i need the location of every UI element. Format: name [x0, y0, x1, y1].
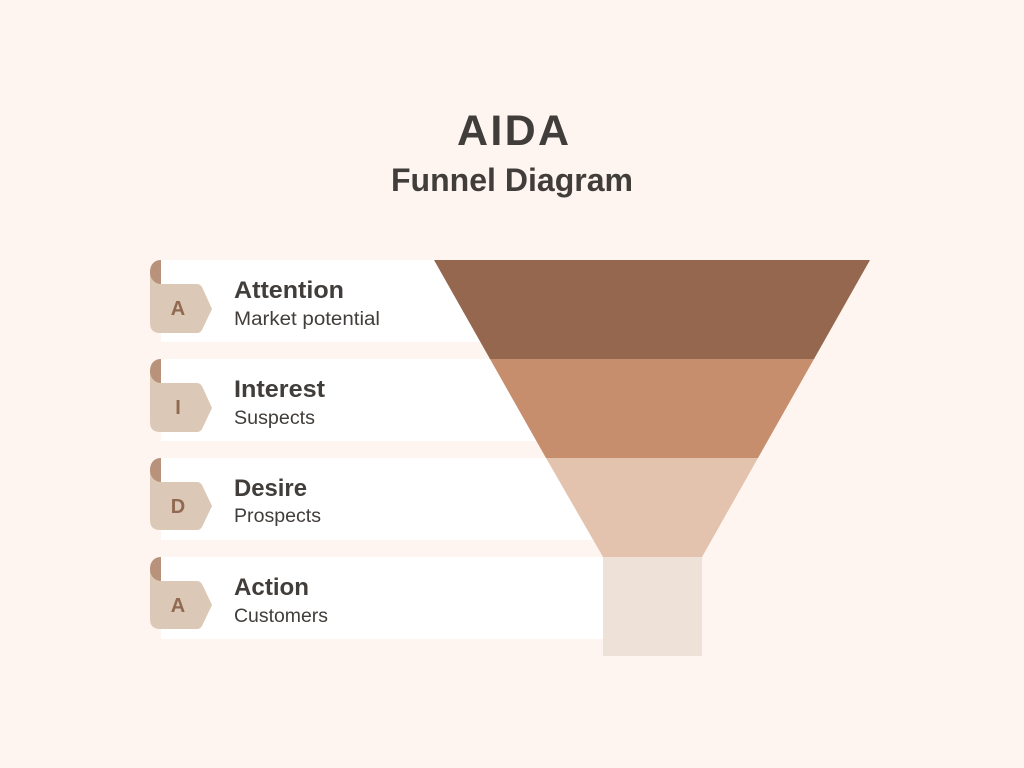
icon: badge A — [150, 260, 212, 333]
funnel tier: action — [603, 557, 702, 656]
text: Customers: Customers — [234, 606, 328, 627]
chart: funnel — [434, 260, 870, 656]
heading: Desire: Desire — [234, 475, 307, 502]
white label bar — [161, 260, 501, 342]
white label bar — [161, 458, 611, 540]
text: Suspects: Suspects — [234, 408, 315, 429]
panel: attention row — [150, 260, 501, 342]
panel: desire row — [150, 458, 611, 540]
title — [391, 107, 633, 198]
funnel tier: attention — [434, 260, 870, 359]
funnel tier: desire — [546, 458, 758, 557]
icon: badge A: A — [171, 298, 185, 320]
icon: badge D — [150, 458, 212, 530]
text: Prospects: Prospects — [234, 506, 321, 527]
icon: badge A — [150, 557, 212, 629]
funnel tier: interest — [490, 359, 814, 458]
panel: action row — [150, 557, 611, 639]
text: Market potential: Market potential — [234, 309, 380, 330]
icon: badge A: A — [171, 595, 185, 617]
icon: badge D: D — [171, 496, 185, 518]
heading: Action: Action — [234, 574, 309, 601]
title: AIDA — [457, 107, 569, 155]
heading: Attention: Attention — [234, 277, 344, 304]
heading: Interest: Interest — [234, 376, 325, 403]
white label bar — [161, 359, 551, 441]
panel: interest row — [150, 359, 551, 441]
icon: badge I — [150, 359, 212, 432]
white label bar — [161, 557, 611, 639]
icon: badge I: I — [175, 397, 181, 419]
title: Funnel Diagram — [391, 162, 633, 198]
